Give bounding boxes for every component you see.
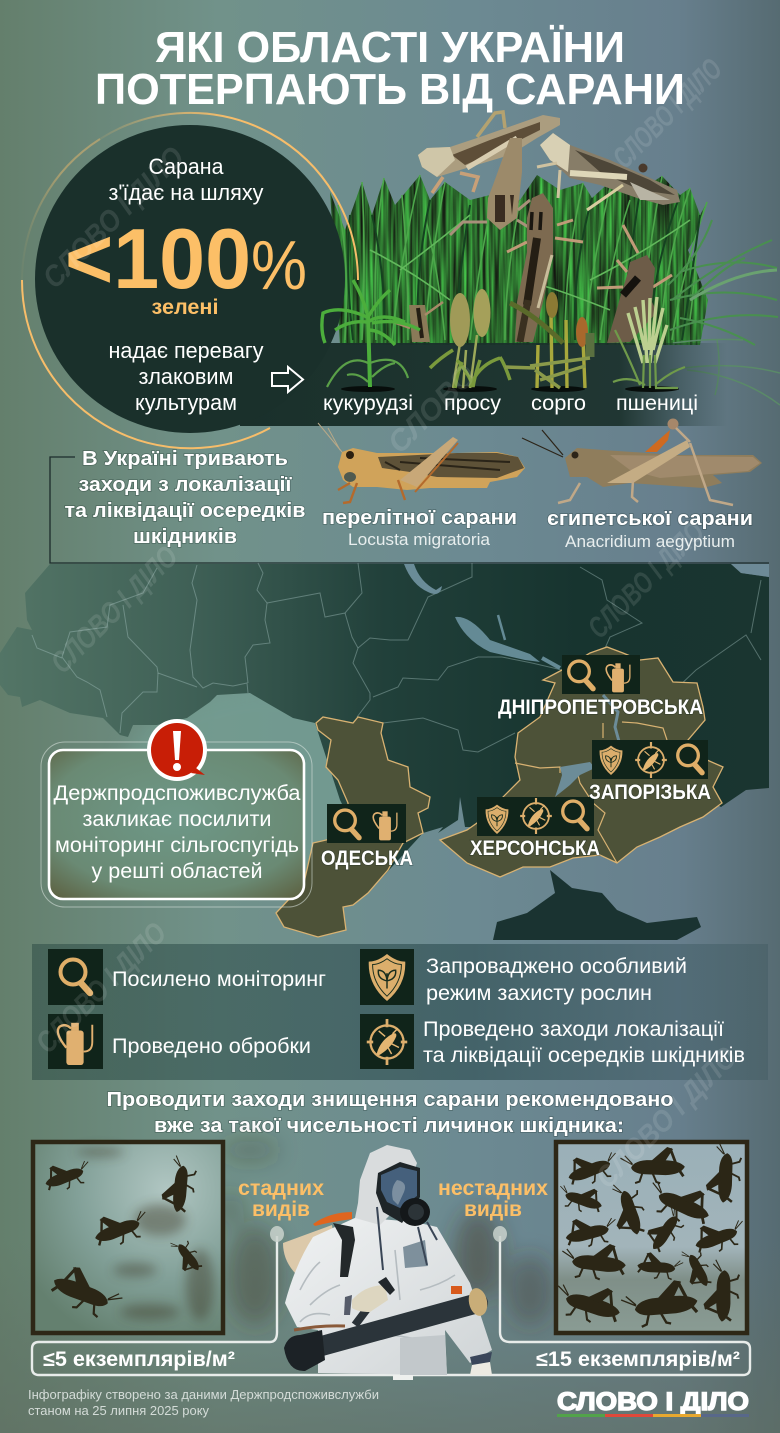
text: measures in Ukraine: заходи з локалізації (78, 474, 292, 496)
big figure: <100 (65, 212, 251, 307)
locust C (537, 133, 680, 210)
crop labels (323, 392, 698, 415)
reservoir north (404, 564, 442, 594)
suit body (285, 1217, 492, 1375)
locust: migratory (318, 423, 525, 503)
inner borders (515, 722, 667, 863)
crop: wheat (613, 297, 685, 392)
locust F (393, 302, 443, 342)
stage labels: нестадних (438, 1177, 548, 1200)
watermarks: СЛОВО І ДІЛО (590, 1041, 744, 1195)
strap (333, 1223, 355, 1277)
watermarks: СЛОВО І ДІЛО (30, 916, 173, 1060)
callout text: моніторинг сільгоспугідь (55, 834, 299, 857)
panel: legend (32, 944, 768, 1080)
legend: protection regime: Запроваджено особливий (426, 955, 687, 978)
bracket line (50, 457, 769, 563)
crop labels: просу (444, 392, 502, 415)
callout: monitoring appeal (41, 719, 312, 907)
stage labels (238, 1177, 548, 1221)
text: measures in Ukraine: В Україні тривають (82, 448, 288, 470)
title (95, 23, 685, 114)
legend: localization: Проведено заходи локалізації (423, 1018, 724, 1041)
regions: Dnipropetrovsk, Zaporizhzhia, Kherson (440, 647, 723, 877)
legend: localization: та ліквідації осередків шкідників (423, 1044, 745, 1067)
dark strip for crops (240, 343, 727, 426)
region labels: ДНІПРОПЕТРОВСЬКА (498, 696, 703, 719)
backpack (283, 1212, 352, 1280)
top-right water (731, 564, 769, 577)
heading: recommendation (106, 1089, 674, 1137)
frame: non-gregarious density (554, 1142, 748, 1334)
side blades (668, 220, 780, 405)
frame: gregarious density (33, 1142, 223, 1333)
callout text: закликає посилити (82, 808, 272, 831)
text: measures in Ukraine (64, 448, 306, 548)
region: Odesa (276, 717, 430, 937)
leader lines and count boxes (32, 1236, 750, 1375)
sprayer tube (284, 1286, 490, 1371)
dark circle (35, 125, 345, 433)
hood (355, 1145, 417, 1225)
callout text: у решті областей (92, 860, 262, 883)
torso shadow (400, 1335, 447, 1375)
circle text block: з'їдає на шляху (108, 180, 264, 205)
grass field (330, 175, 780, 405)
locust A (418, 112, 560, 193)
crop labels: сорго (531, 392, 586, 415)
circle text block: Сарана (148, 154, 224, 179)
gold ring (22, 113, 358, 448)
icon group: Zaporizhzhia (592, 740, 708, 779)
legend: protection regime (360, 949, 687, 1005)
source note: Інфографіку створено за даними Держпродспоживслужби (28, 1387, 379, 1402)
count labels: ≤15 екземплярів/м² (536, 1348, 740, 1371)
text: measures in Ukraine: шкідників (133, 526, 237, 548)
icon: arrow (272, 367, 303, 392)
count labels: ≤5 екземплярів/м² (43, 1348, 235, 1371)
text: measures in Ukraine: та ліквідації осередків (64, 500, 306, 522)
suit folds (300, 1250, 455, 1340)
callout text: Держпродспоживслужба (54, 782, 301, 805)
watermarks: СЛОВО І ДІЛО (582, 516, 711, 645)
logo: СЛОВО І ДІЛО (557, 1388, 749, 1416)
notch (393, 1375, 413, 1380)
title: ЯКІ ОБЛАСТІ УКРАЇНИ (155, 23, 625, 72)
glove (344, 1277, 395, 1315)
species labels: перелітної сарани (322, 507, 517, 529)
region labels: ОДЕСЬКА (321, 847, 413, 870)
legend: monitoring: Посилено моніторинг (112, 968, 326, 991)
count labels (43, 1348, 740, 1371)
circle text block (65, 154, 307, 415)
legend: monitoring (48, 949, 326, 1005)
circle text block: культурам (135, 390, 237, 415)
crop labels: пшениці (616, 392, 698, 415)
region labels: ЗАПОРІЗЬКА (589, 781, 711, 804)
chest shadow (403, 1240, 428, 1268)
locust silhouettes (554, 1142, 748, 1334)
hanging tubes (377, 1207, 437, 1270)
source note (28, 1387, 379, 1418)
crop: millet (430, 289, 510, 392)
crop: corn (322, 280, 420, 392)
legend: treatment (48, 1014, 311, 1069)
big figure: % (251, 226, 307, 304)
watermarks: СЛОВО І ДІЛО (37, 141, 191, 295)
stage labels: видів (252, 1198, 310, 1221)
stage labels: стадних (238, 1177, 324, 1200)
region labels (321, 696, 711, 870)
blurred shapes (76, 1147, 214, 1321)
heading: recommendation: вже за такої чисельності личинок шкідника: (154, 1115, 624, 1137)
Crimea (493, 870, 701, 940)
species labels (322, 507, 753, 551)
species labels: Anacridium aegyptium (565, 532, 735, 551)
crop: sorghum (505, 292, 590, 392)
lower glove (470, 1352, 492, 1375)
locust E (597, 225, 672, 343)
legend: localization (360, 1014, 745, 1069)
locust D (507, 193, 583, 342)
icon group: Dnipropetrovsk (562, 655, 640, 694)
watermarks (30, 53, 744, 1195)
icon: alert (147, 719, 207, 781)
legend: treatment: Проведено обробки (112, 1035, 311, 1058)
circle text block: надає перевагу (108, 338, 264, 363)
species labels: Locusta migratoria (348, 530, 491, 549)
icon group: Odesa (327, 804, 406, 843)
map of Ukraine (0, 563, 769, 940)
river Dnipro (603, 695, 620, 745)
stage labels: видів (464, 1198, 522, 1221)
legend: protection regime: режим захисту рослин (426, 982, 652, 1005)
icon group: Kherson (477, 797, 594, 836)
title: ПОТЕРПАЮТЬ ВІД САРАНИ (95, 65, 685, 114)
circle text block: зелені (152, 296, 218, 319)
photo: grass with locusts (330, 112, 780, 405)
locust B (450, 138, 530, 235)
locust silhouettes (42, 1154, 205, 1327)
watermarks: СЛОВО (382, 359, 483, 460)
region labels: ХЕРСОНСЬКА (470, 837, 600, 860)
oblast borders (32, 563, 761, 752)
heading: recommendation: Проводити заходи знищення сарани рекомендовано (106, 1089, 674, 1111)
person in protective suit (283, 1145, 492, 1380)
leader dots (270, 1226, 507, 1242)
circle text block: злаковим (138, 364, 234, 389)
sea highlight (120, 685, 420, 875)
blurred swarm backdrop (216, 1140, 554, 1325)
land (0, 564, 769, 880)
species labels: єгипетської сарани (547, 508, 753, 530)
reservoir Kremenchuk (455, 617, 540, 662)
watermarks: СЛОВО І ДІЛО (45, 540, 185, 680)
mask (376, 1162, 430, 1226)
source note: станом на 25 липня 2025 року (28, 1403, 209, 1418)
callout text (54, 782, 301, 883)
watermarks: СЛОВО І ДІЛО (607, 53, 729, 175)
locust: Egyptian (522, 418, 762, 505)
crop labels: кукурудзі (323, 392, 413, 415)
